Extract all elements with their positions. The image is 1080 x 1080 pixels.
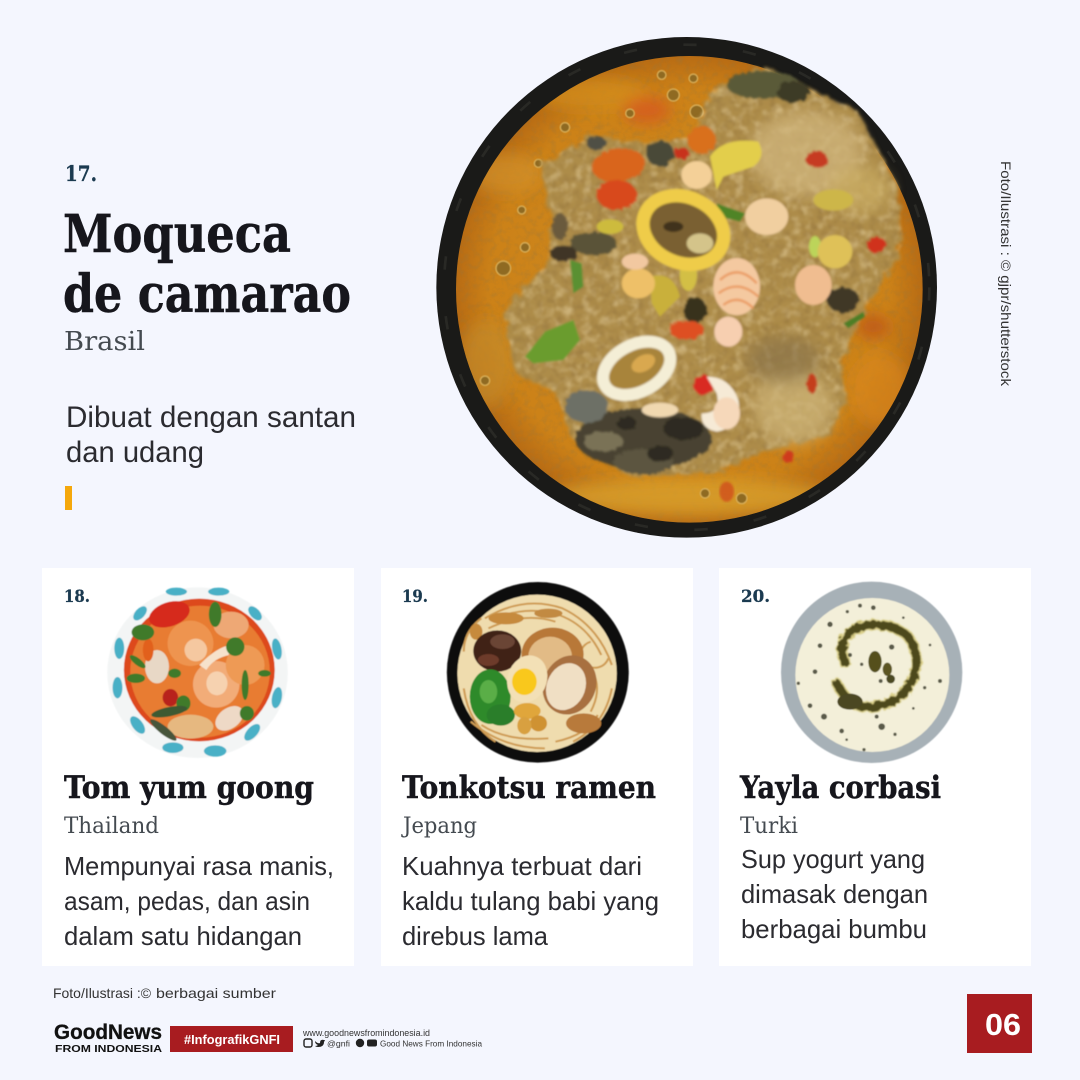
hashtag badge: #InfografikGNFI (184, 1032, 280, 1047)
bowl photo: ramen (447, 582, 629, 763)
number 20: 20. (741, 587, 770, 607)
page number badge: 06 (985, 1007, 1021, 1042)
tomatoes (590, 126, 886, 463)
green peppers (525, 320, 580, 363)
country: Thailand (64, 814, 159, 839)
page number badge (967, 994, 1032, 1053)
logo: GoodNews From Indonesia (54, 1021, 162, 1055)
description: Sup yogurt yang (741, 844, 925, 874)
chashu pork (522, 628, 584, 681)
blue rim motifs (113, 588, 284, 757)
icon: youtube (367, 1040, 377, 1046)
soup (456, 56, 923, 523)
logo: GoodNews From Indonesia: FROM INDONESIA (55, 1043, 162, 1055)
social links: www.goodnewsfromindonesia.id (302, 1028, 430, 1038)
dish name: Yayla corbasi (739, 770, 941, 806)
title: de camarao (63, 264, 351, 325)
description: dan udang (66, 436, 204, 469)
yellow peppers (710, 141, 762, 190)
social links: @gnfi (327, 1038, 350, 1048)
accent bar (65, 486, 72, 510)
card 20: Yayla corbasi (719, 568, 1031, 966)
description: direbus lama (402, 921, 549, 951)
wood ear mushroom (473, 630, 521, 672)
garlic (514, 703, 541, 719)
squid curl lower right (702, 377, 739, 432)
photo credit vertical: Foto/Ilustrasi : © gjpr/shutterstock (998, 161, 1014, 387)
country: Jepang (401, 814, 477, 839)
bubbles (480, 71, 747, 504)
description: Mempunyai rasa manis, (64, 851, 334, 881)
number 17: 17. (65, 161, 97, 186)
icon: instagram (304, 1039, 312, 1047)
number 19: 19. (402, 587, 428, 607)
bowl photo: yogurt soup (781, 582, 962, 763)
green onion (470, 669, 511, 724)
flaked crab (747, 110, 890, 443)
description: Kuahnya terbuat dari (402, 851, 642, 881)
description: Dibuat dengan santan (66, 401, 356, 434)
description: dalam satu hidangan (64, 921, 302, 951)
main dish photo: moqueca pan (436, 37, 937, 538)
number 18: 18. (64, 587, 90, 607)
country: Turki (740, 814, 798, 839)
shrimps (713, 258, 760, 315)
icon: twitter (315, 1040, 325, 1047)
seafood and vegetable pile (497, 63, 910, 483)
social links: Good News From Indonesia (380, 1038, 482, 1048)
footer photo credit: berbagai sumber (156, 985, 276, 1001)
footer photo credit: Foto/Ilustrasi :© (53, 985, 152, 1001)
description: berbagai bumbu (741, 914, 927, 944)
country: Brasil (64, 327, 145, 357)
dish name: Tonkotsu ramen (402, 770, 656, 806)
card background (42, 568, 354, 966)
herb oil swirl (837, 625, 916, 707)
description: asam, pedas, dan asin (64, 886, 310, 916)
bowl photo: tom yum (107, 587, 288, 758)
dark mussels (550, 71, 859, 474)
title: Moqueca (63, 204, 291, 265)
icon: facebook (356, 1039, 364, 1047)
noodles (464, 603, 612, 748)
egg (502, 651, 553, 707)
description: dimasak dengan (741, 879, 928, 909)
social links (302, 1028, 482, 1048)
squid ring bottom (594, 331, 679, 406)
heading block: dish 17 (63, 161, 356, 510)
logo: GoodNews From Indonesia: GoodNews (54, 1021, 162, 1044)
squid ring top (632, 183, 735, 277)
card 18: Tom yum goong (42, 568, 354, 966)
card background (719, 568, 1031, 966)
card background (381, 568, 693, 966)
hashtag badge (170, 1026, 293, 1052)
dish name: Tom yum goong (64, 770, 314, 806)
card 19: Tonkotsu ramen (381, 568, 693, 966)
description: kaldu tulang babi yang (402, 886, 659, 916)
specks (797, 604, 942, 751)
soup contents (145, 596, 194, 632)
herbs (127, 602, 271, 721)
pan rim (436, 37, 937, 538)
